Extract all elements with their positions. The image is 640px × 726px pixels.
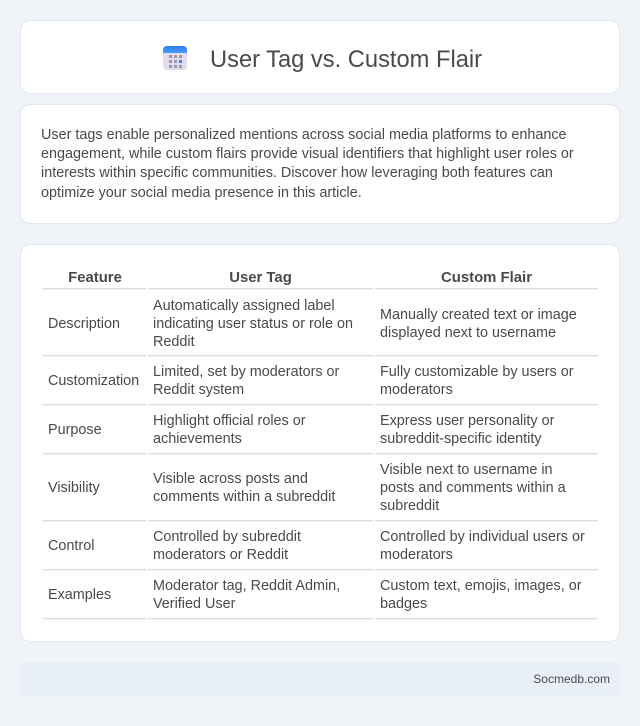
panel: title: [20, 20, 620, 94]
row: examples: badges: [380, 596, 427, 612]
row: visibility: posts and comments within a: [380, 480, 566, 496]
row: control: [48, 529, 585, 563]
row: examples: Moderator tag, Reddit Admin,: [153, 578, 340, 594]
row: customization: moderators: [380, 382, 453, 398]
row: visibility: comments within a subreddit: [153, 489, 335, 505]
icon: calendar: [163, 46, 187, 70]
intro text: interests within specific communities. Discover how leveraging both features can: [41, 165, 553, 181]
row: purpose: [48, 413, 554, 447]
panel: comparison table: [20, 244, 620, 642]
row: purpose: subreddit-specific identity: [380, 431, 542, 447]
row: control: moderators or Reddit: [153, 547, 288, 563]
row: description: indicating user status or role on: [153, 316, 353, 332]
row: visibility: [48, 462, 566, 514]
row: visibility: Visibility: [48, 480, 100, 496]
row: control: Controlled by individual users or: [380, 529, 585, 545]
footer: [20, 662, 620, 696]
intro text: [41, 127, 574, 201]
row: purpose: achievements: [153, 431, 242, 447]
row: visibility: Visible next to username in: [380, 462, 553, 478]
intro text: optimize your social media presence in this article.: [41, 185, 362, 201]
row: purpose: Express user personality or: [380, 413, 554, 429]
intro text: User tags enable personalized mentions across social media platforms to enhance: [41, 127, 567, 143]
row: control: Control: [48, 538, 94, 554]
table header: [68, 270, 532, 286]
row: purpose: Purpose: [48, 422, 102, 438]
row: description: Automatically assigned label: [153, 298, 335, 314]
table header: User Tag: [229, 270, 292, 286]
intro text: engagement, while custom flairs provide visual identifiers that highlight user roles or: [41, 146, 574, 162]
row: description: displayed next to username: [380, 325, 556, 341]
row: examples: Verified User: [153, 596, 235, 612]
row: customization: [48, 364, 574, 398]
row: description: [48, 298, 577, 350]
row: customization: Limited, set by moderators or: [153, 364, 339, 380]
row: purpose: Highlight official roles or: [153, 413, 306, 429]
row: description: Description: [48, 316, 120, 332]
table header: Custom Flair: [441, 270, 532, 286]
panel: introduction: [20, 104, 620, 224]
table header: Feature: [68, 270, 122, 286]
row: control: Controlled by subreddit: [153, 529, 301, 545]
row: customization: Fully customizable by users or: [380, 364, 574, 380]
title text: User Tag vs. Custom Flair: [210, 47, 482, 73]
row: control: moderators: [380, 547, 453, 563]
row: description: Reddit: [153, 334, 195, 350]
row: examples: Custom text, emojis, images, or: [380, 578, 582, 594]
row: customization: Reddit system: [153, 382, 244, 398]
row: description: Manually created text or image: [380, 307, 577, 323]
footer credit: Socmedb.com: [533, 672, 610, 686]
row: customization: Customization: [48, 373, 139, 389]
row: examples: [48, 578, 582, 612]
row: examples: Examples: [48, 587, 111, 603]
row: visibility: subreddit: [380, 498, 439, 514]
row: visibility: Visible across posts and: [153, 471, 308, 487]
